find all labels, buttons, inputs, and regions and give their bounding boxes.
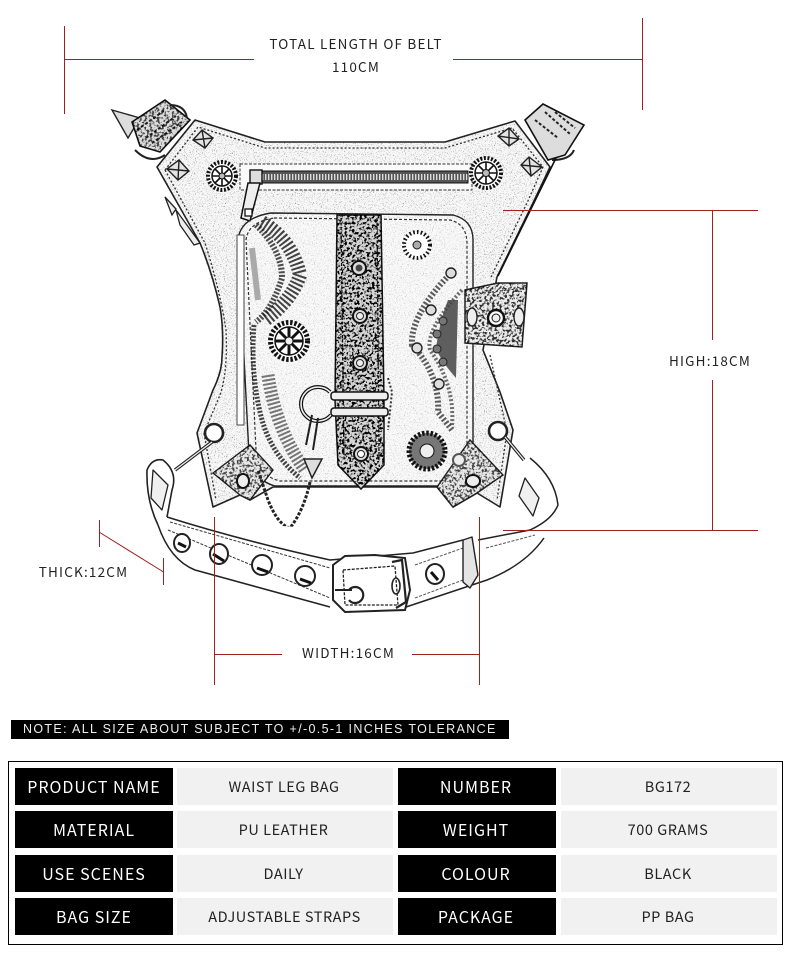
row 1 value: WAIST LEG BAG bbox=[228, 776, 340, 797]
row 2 value: PU LEATHER bbox=[239, 819, 328, 840]
row 2 value: weight bbox=[561, 811, 777, 848]
row 2 value bbox=[177, 811, 393, 848]
waist belt bbox=[147, 458, 558, 610]
dimension: thickness: THICK:12CM bbox=[39, 561, 128, 581]
specification table bbox=[8, 761, 783, 945]
tolerance note: NOTE: ALL SIZE ABOUT SUBJECT TO +/-0.5-1 INCHES TOLERANCE bbox=[23, 722, 497, 736]
row 1 label: number bbox=[398, 768, 556, 805]
row 4 label: bag size bbox=[15, 898, 173, 935]
row 3 label: colour: COLOUR bbox=[441, 861, 511, 885]
row 1 label: product name bbox=[15, 768, 173, 805]
center strap bbox=[334, 214, 385, 490]
bag illustration with dimension lines bbox=[39, 18, 758, 685]
strap buckle and ring bbox=[301, 378, 392, 430]
left top buckle bbox=[112, 100, 200, 245]
left gear-tooth trim bbox=[252, 222, 305, 478]
gears bbox=[208, 158, 501, 469]
row 3 value: colour: BLACK bbox=[644, 863, 692, 884]
dimension: total belt length: 110CM bbox=[332, 56, 380, 76]
dimension: total belt length: TOTAL LENGTH OF BELT bbox=[269, 33, 443, 53]
dimension: width bbox=[214, 517, 480, 685]
dimension: width: WIDTH:16CM bbox=[302, 642, 395, 662]
chains and clasps bbox=[175, 415, 524, 528]
bag body bbox=[150, 120, 555, 510]
row 3 value: colour bbox=[561, 855, 777, 892]
lower tabs and rings bbox=[125, 95, 510, 510]
dimension: total belt length bbox=[64, 18, 642, 114]
row 4 label: bag size: BAG SIZE bbox=[56, 904, 132, 928]
front pocket bbox=[237, 213, 473, 486]
row 3 label: colour bbox=[398, 855, 556, 892]
row 1 label: product name: PRODUCT NAME bbox=[27, 774, 161, 798]
belt buckle bbox=[333, 555, 410, 612]
row 4 value: ADJUSTABLE STRAPS bbox=[208, 906, 361, 927]
row 4 label: package: PACKAGE bbox=[438, 904, 514, 928]
row 1 value: number bbox=[561, 768, 777, 805]
row 3 label: use scenes bbox=[15, 855, 173, 892]
row 3 value bbox=[177, 855, 393, 892]
row 2 value: weight: 700 GRAMS bbox=[628, 819, 708, 840]
row 4 value: package bbox=[561, 898, 777, 935]
top zipper bbox=[240, 164, 472, 221]
right studded trim bbox=[412, 268, 462, 430]
dimension: height: HIGH:18CM bbox=[669, 350, 751, 370]
row 3 label: use scenes: USE SCENES bbox=[42, 861, 146, 885]
row 2 label: weight bbox=[398, 811, 556, 848]
side tab bbox=[464, 282, 528, 348]
row 4 value: package: PP BAG bbox=[641, 906, 695, 927]
row 4 value bbox=[177, 898, 393, 935]
right top buckle bbox=[498, 104, 584, 276]
row 4 label: package bbox=[398, 898, 556, 935]
row 2 label: weight: WEIGHT bbox=[443, 817, 509, 841]
dimension: height bbox=[503, 210, 758, 530]
row 1 value: number: BG172 bbox=[645, 776, 691, 797]
belt grommets bbox=[174, 534, 444, 586]
row 2 label: material: MATERIAL bbox=[53, 817, 135, 841]
pyramid studs bbox=[167, 128, 542, 180]
dimension: thickness bbox=[39, 520, 164, 585]
row 3 value: DAILY bbox=[264, 863, 303, 884]
row 2 label: material bbox=[15, 811, 173, 848]
row 1 label: number: NUMBER bbox=[440, 774, 512, 798]
row 1 value bbox=[177, 768, 393, 805]
